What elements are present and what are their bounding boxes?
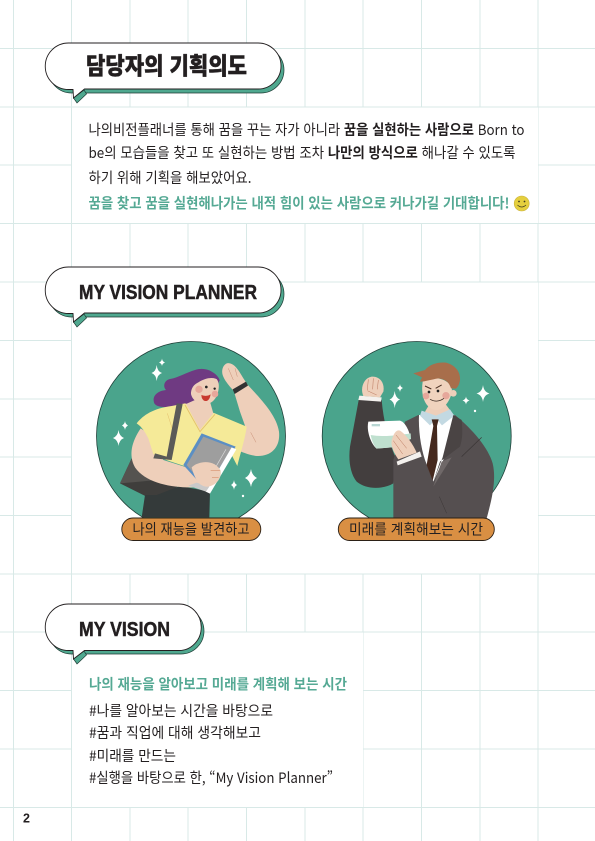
- label pill: 나의 재능을 발견하고: 나의 재능을 발견하고: [132, 518, 250, 540]
- woman bag: [120, 458, 177, 500]
- woman strap: [153, 403, 183, 460]
- heading bubble: 담당자의 기획의도: [45, 43, 284, 103]
- woman hair: [154, 369, 219, 407]
- heading text: 담당자의 기획의도: [86, 47, 247, 81]
- man collar: [420, 409, 454, 425]
- woman raised arm: [234, 384, 279, 456]
- man lapel: [433, 415, 462, 482]
- man tie: [427, 419, 439, 481]
- intro text block: be의 모습들을 찾고 또 실현하는 방법 조차 나만의 방식으로 해나갈 수 있도록: [88, 142, 516, 163]
- man suit: [393, 415, 494, 518]
- intro text block: 꿈을 찾고 꿈을 실현해나가는 내적 힘이 있는 사람으로 커나가길 기대합니다!: [88, 192, 510, 214]
- heading bubble: MY VISION: [45, 604, 204, 664]
- page number: 2: [23, 812, 30, 826]
- hashtag list: #실행을 바탕으로 한, “My Vision Planner”: [89, 767, 333, 788]
- man neck: [425, 403, 450, 421]
- subheading: 나의 재능을 알아보고 미래를 계획해 보는 시간: [89, 674, 347, 694]
- hashtag list: #나를 알아보는 시간을 바탕으로: [89, 700, 273, 721]
- hashtag list: #미래를 만드는: [89, 745, 176, 766]
- man hair: [413, 363, 460, 389]
- sparkles: [390, 384, 490, 412]
- illustration: woman with book: [96, 342, 286, 530]
- man shirt: [419, 415, 454, 482]
- woman face: [191, 375, 219, 404]
- man face: [422, 378, 452, 410]
- woman book: [183, 433, 236, 492]
- man raised arm: [349, 398, 395, 488]
- icon: smiley: [514, 196, 529, 211]
- woman left arm: [131, 428, 220, 487]
- hashtag list: [89, 700, 333, 788]
- man hand: [391, 430, 417, 459]
- label pill: 미래를 계획해보는 시간: 미래를 계획해보는 시간: [349, 518, 483, 540]
- man phone: [368, 421, 411, 449]
- sparkles: [113, 358, 257, 497]
- woman hand: [192, 462, 221, 487]
- woman shirt: [137, 403, 247, 467]
- illustration: man with phone: [322, 342, 511, 530]
- intro text block: 하기 위해 기획을 해보았어요.: [88, 167, 252, 188]
- hashtag list: #꿈과 직업에 대해 생각해보고: [89, 722, 261, 743]
- woman neck: [186, 400, 213, 430]
- heading text: MY VISION: [79, 619, 170, 641]
- intro text block: [88, 119, 525, 214]
- heading bubble: MY VISION PLANNER: [45, 267, 284, 327]
- woman pants: [142, 486, 210, 517]
- heading text: MY VISION PLANNER: [79, 282, 257, 304]
- intro text block: 나의비전플래너를 통해 꿈을 꾸는 자가 아니라 꿈을 실현하는 사람으로 Born to: [88, 119, 525, 140]
